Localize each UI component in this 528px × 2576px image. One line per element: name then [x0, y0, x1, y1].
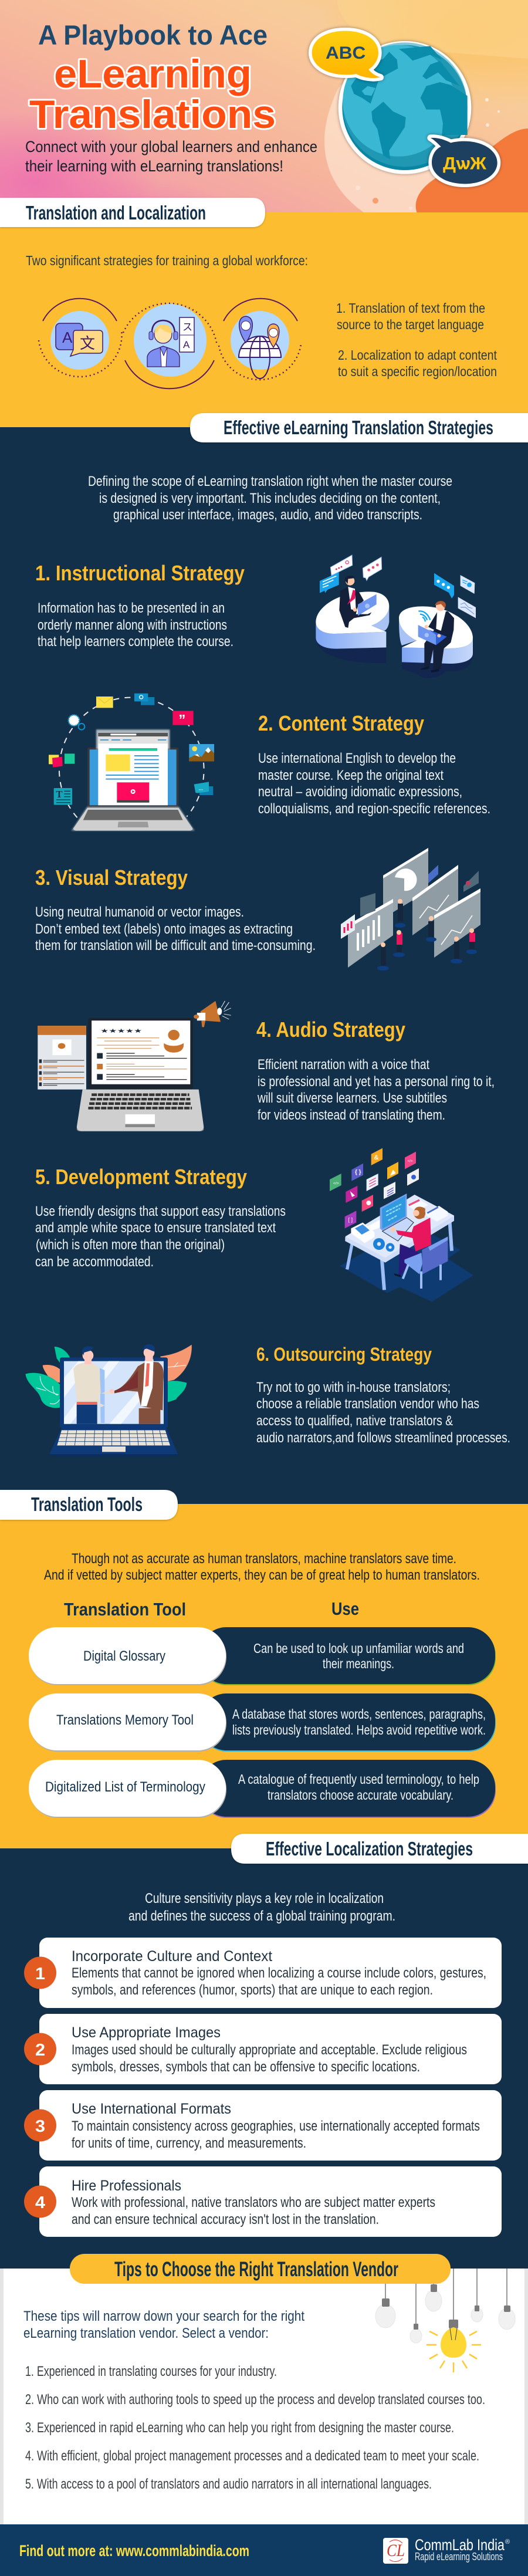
logo: ® — [505, 2538, 510, 2545]
floating tiles: & — [374, 1154, 379, 1161]
card 2: Use Appropriate Images — [24, 2014, 502, 2084]
tool row: Translations Memory Tool — [29, 1693, 496, 1752]
icon: text doc: T — [56, 789, 62, 800]
intro text: scope of translation — [88, 474, 452, 523]
tool row: Digitalized List of Terminology — [29, 1760, 496, 1818]
icon: globe with location pins — [231, 311, 289, 378]
section background: yellow tools — [0, 1504, 528, 1848]
heading: 5. Development Strategy — [35, 1165, 247, 1189]
card 2: Use Appropriate Images: symbols, dresses, symbols that can be offensive to specific locations. — [72, 2059, 420, 2075]
body text: Using neutral humanoid or vector images. — [35, 904, 244, 920]
illustration: audio laptop — [38, 1001, 231, 1131]
leaves — [25, 1345, 192, 1408]
card 1: Incorporate Culture and Context: symbols, and references (humor, sports) that are unique to each region. — [72, 1982, 433, 1998]
body text: Don’t embed text (labels) onto images as extracting — [35, 921, 293, 937]
subtitle — [25, 138, 317, 175]
footer — [0, 2524, 528, 2576]
table header: Use — [331, 1598, 359, 1619]
heading: Effective eLearning Translation Strategies — [190, 413, 528, 442]
logo — [383, 2536, 510, 2564]
body text: access to qualified, native translators & — [256, 1413, 453, 1429]
card 3: Use International Formats: Use International Formats — [72, 2101, 231, 2117]
laptop screen: ★★★★★ — [100, 1028, 142, 1034]
title line 3: Translations — [29, 92, 276, 137]
body text: neutral – avoiding idiomatic expressions, — [258, 784, 462, 800]
laptop — [49, 1357, 178, 1456]
icon row: translation and localization — [39, 299, 301, 388]
list: two strategies — [336, 300, 497, 379]
icon: megaphone — [194, 1001, 231, 1027]
card 3: Use International Formats — [24, 2090, 502, 2161]
number badge — [24, 2185, 56, 2218]
footer link text: Find out more at: www.commlabindia.com — [19, 2542, 249, 2560]
body text: them for translation will be difficult and time-consuming. — [35, 938, 316, 954]
subtitle: Connect with your global learners and enhance — [25, 138, 317, 155]
intro text: vendor tips: These tips will narrow down your search for the right — [23, 2308, 304, 2324]
floating tiles: </> — [333, 1182, 339, 1186]
laptop — [380, 1194, 414, 1241]
speech bubble ABC — [312, 31, 380, 78]
floating tiles — [330, 1148, 419, 1228]
body text: Try not to go with in-house translators; — [256, 1380, 451, 1395]
body text — [35, 904, 316, 954]
person right — [418, 601, 454, 672]
intro text: culture sensitivity — [128, 1891, 395, 1924]
heading: Translation Tools: Translation Tools — [31, 1493, 143, 1515]
icon: interpreter with headset — [134, 304, 207, 377]
card 1: Incorporate Culture and Context: Incorporate Culture and Context — [72, 1948, 272, 1965]
intro text: culture sensitivity: Culture sensitivity plays a key role in localization — [145, 1891, 384, 1906]
tool row: Digital Glossary — [29, 1627, 496, 1685]
man right — [110, 1344, 164, 1424]
icon: interpreter with headset: ス — [182, 319, 192, 333]
card 4: Hire Professionals: Work with professional, native translators who are subject matter experts — [72, 2195, 435, 2210]
strategy 1: Instructional — [35, 561, 245, 650]
heading: Effective Localization Strategies — [231, 1834, 528, 1864]
section background: white vendor tips — [4, 2269, 524, 2524]
illustration: two professionals on chat shapes — [316, 555, 476, 678]
body text: Use international English to develop the — [258, 751, 456, 766]
number badge: 3 — [35, 2117, 45, 2136]
laptop — [72, 729, 195, 831]
list: two strategies: to suit a specific region/location — [338, 364, 497, 379]
body text: Information has to be presented in an — [38, 600, 225, 616]
icon: sticky notes — [49, 753, 75, 768]
desk — [345, 1195, 454, 1290]
number badge — [24, 1956, 56, 1989]
table header — [64, 1598, 359, 1620]
strategy 5: Development — [35, 1165, 286, 1270]
illustration: developer at desk — [330, 1148, 473, 1301]
body text: (which is often more than the original) — [36, 1237, 225, 1253]
body text — [256, 1380, 510, 1446]
tool row: Digitalized List of Terminology: translators choose accurate vocabulary. — [268, 1787, 453, 1803]
strategy 3: Visual — [35, 866, 316, 954]
intro text: machine translators — [44, 1551, 480, 1583]
section background: navy strategies — [0, 427, 528, 1504]
list: vendor criteria — [25, 2364, 485, 2492]
icon: envelope — [96, 697, 113, 708]
chat bubbles — [320, 555, 476, 618]
number badge: 4 — [35, 2193, 45, 2212]
heading: Translation and Localization: Translation and Localization — [26, 202, 206, 224]
number badge — [24, 2033, 56, 2065]
icon: text doc — [54, 788, 72, 805]
heading: 3. Visual Strategy — [35, 866, 188, 890]
icon: chat: … — [198, 786, 203, 792]
strategy 2: Content — [258, 711, 490, 817]
icon: video cards — [134, 694, 154, 705]
card 4: Hire Professionals: Hire Professionals — [72, 2178, 181, 2194]
chair — [403, 1236, 448, 1289]
body text: that help learners complete the course. — [38, 634, 233, 650]
body text: Use friendly designs that support easy translations — [35, 1204, 286, 1219]
card 4: Hire Professionals: and can ensure technical accuracy isn't lost in the translation. — [72, 2212, 379, 2227]
list: two strategies: 1. Translation of text from the — [336, 300, 485, 316]
body text: can be accommodated. — [35, 1254, 154, 1270]
tool row: Digital Glossary: Can be used to look up unfamiliar words and — [253, 1641, 464, 1656]
intro text: vendor tips — [23, 2308, 304, 2341]
floating tiles: [ ] — [348, 1217, 353, 1223]
icon: language translation — [50, 311, 109, 370]
number badge: 2 — [35, 2041, 45, 2060]
body text — [258, 751, 490, 817]
section background: navy localization — [0, 1848, 528, 2269]
man left — [73, 1346, 110, 1424]
body text: and ample white space to ensure translated text — [35, 1220, 276, 1236]
heading: 6. Outsourcing Strategy — [256, 1344, 432, 1365]
tool row: Digital Glossary: Digital Glossary — [83, 1648, 165, 1664]
table header: Translation Tool — [64, 1599, 186, 1620]
illustration: content hub laptop — [49, 694, 214, 831]
side strips — [0, 2269, 528, 2524]
laptop screen — [88, 1018, 193, 1089]
heading: 2. Content Strategy — [258, 711, 424, 735]
title — [29, 19, 276, 137]
decorative arcs — [39, 299, 301, 388]
icon: quote: ” — [178, 712, 185, 728]
body text: orderly manner along with instructions — [38, 617, 227, 633]
number badge: 1 — [35, 1965, 45, 1983]
card 1: Incorporate Culture and Context — [24, 1938, 502, 2008]
body text — [35, 1204, 286, 1270]
section background: yellow intro — [0, 212, 528, 427]
intro text: vendor tips: eLearning translation vendor. Select a vendor: — [23, 2325, 269, 2341]
list: two strategies: source to the target language — [337, 317, 484, 332]
body text: will suit diverse learners. Use subtitles — [257, 1090, 447, 1106]
intro text: scope of translation: is designed is very important. This includes deciding on the content, — [99, 491, 441, 506]
list: vendor criteria: 1. Experienced in translating courses for your industry. — [25, 2364, 277, 2379]
card 3: Use International Formats: for units of time, currency, and measurements. — [72, 2135, 306, 2151]
tool row: Digitalized List of Terminology: Digitalized List of Terminology — [45, 1779, 205, 1795]
strategy 4: Audio — [256, 1017, 495, 1123]
dashed ring — [59, 698, 204, 817]
illustration: hanging light bulbs — [375, 2269, 515, 2372]
heading: 1. Instructional Strategy — [35, 561, 245, 585]
lit bulb — [441, 2327, 466, 2358]
body text — [257, 1057, 495, 1123]
heading: Translation Tools — [0, 1490, 178, 1520]
speech bubble Cyrillic — [431, 138, 497, 184]
icon: chat — [194, 782, 213, 795]
heading pill: Tips to Choose the Right Translation Vendor — [70, 2254, 451, 2284]
body text: choose a reliable translation vendor who has — [256, 1396, 479, 1412]
title line 2: eLearning — [54, 52, 252, 96]
list: two strategies: 2. Localization to adapt content — [338, 347, 497, 363]
card 4: Hire Professionals — [24, 2166, 502, 2237]
icon: globe with speech bubbles — [312, 31, 497, 184]
body text: for videos instead of translating them. — [258, 1107, 445, 1123]
speech bubble ABC: ABC — [326, 43, 365, 63]
logo: CL — [387, 2541, 405, 2560]
intro text: scope of translation: Defining the scope of eLearning translation right when the master course — [88, 474, 452, 489]
floating tiles: </> — [408, 1160, 413, 1164]
subtitle: their learning with eLearning translations! — [25, 157, 283, 175]
speech bubble Cyrillic: ДѡЖ — [443, 154, 487, 173]
heading: 4. Audio Strategy — [256, 1017, 405, 1042]
intro text: scope of translation: graphical user interface, images, audio, and video transcripts. — [113, 507, 422, 523]
person left — [339, 576, 377, 628]
tool row: Translations Memory Tool: Translations Memory Tool — [56, 1712, 194, 1728]
person — [391, 1207, 431, 1277]
card 2: Use Appropriate Images: Use Appropriate Images — [72, 2024, 221, 2041]
header background — [0, 0, 528, 252]
intro text: culture sensitivity: and defines the success of a global training program. — [128, 1908, 395, 1924]
side panel — [38, 1026, 86, 1090]
heading: Translation and Localization — [0, 198, 265, 227]
strategy 6: Outsourcing — [256, 1344, 510, 1446]
tool row: Digital Glossary: their meanings. — [323, 1656, 394, 1671]
number badge — [24, 2109, 56, 2142]
globe — [339, 41, 471, 174]
illustration: partnership handshake on laptop — [25, 1344, 192, 1456]
intro text: two strategies: Two significant strategies for training a global workforce: — [26, 253, 308, 268]
illustration: data panels and team — [341, 848, 480, 971]
icon: picture — [189, 744, 214, 761]
icon: quote — [172, 711, 194, 728]
floor — [340, 1234, 473, 1301]
body text — [38, 600, 233, 650]
laptop base — [77, 1090, 204, 1131]
icon: gears — [69, 715, 84, 730]
icon: language translation: 文 — [80, 332, 95, 353]
floating tiles: { } — [355, 1169, 361, 1176]
icon: language translation: A — [62, 329, 73, 346]
body text: master course. Keep the original text — [258, 768, 444, 783]
title line 1: A Playbook to Ace — [38, 19, 268, 50]
body text: Efficient narration with a voice that — [258, 1057, 429, 1073]
logo: CommLab India — [415, 2536, 505, 2554]
icon: interpreter with headset: A — [183, 339, 190, 350]
